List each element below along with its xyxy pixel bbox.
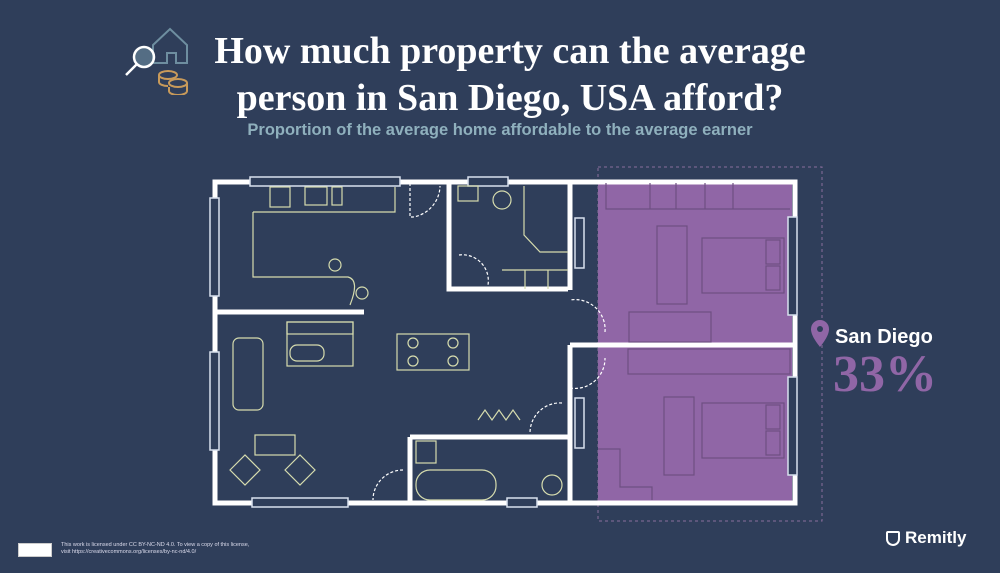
bedroom furniture [598, 183, 790, 500]
label: San Diego [811, 320, 933, 348]
license footer: visit https://creativecommons.org/licenses/by-nc-nd/4.0/ [61, 549, 196, 555]
doors [373, 183, 605, 500]
furniture [230, 186, 568, 500]
value: 33%: 33% [833, 346, 937, 403]
subtitle: Proportion of the average home affordable to the average earner [247, 121, 753, 139]
license footer: This work is licensed under CC BY-NC-ND 4.0. To view a copy of this license, [61, 542, 249, 548]
walls [215, 182, 795, 503]
label: San Diego: San Diego [835, 326, 933, 348]
icon: house search coins [125, 28, 188, 95]
windows [210, 177, 797, 507]
title: How much property can the average person in San Diego, USA afford? [214, 30, 806, 119]
logo: Remitly: Remitly [905, 528, 966, 547]
license footer [18, 542, 249, 557]
highlighted area: bedrooms [598, 167, 822, 521]
